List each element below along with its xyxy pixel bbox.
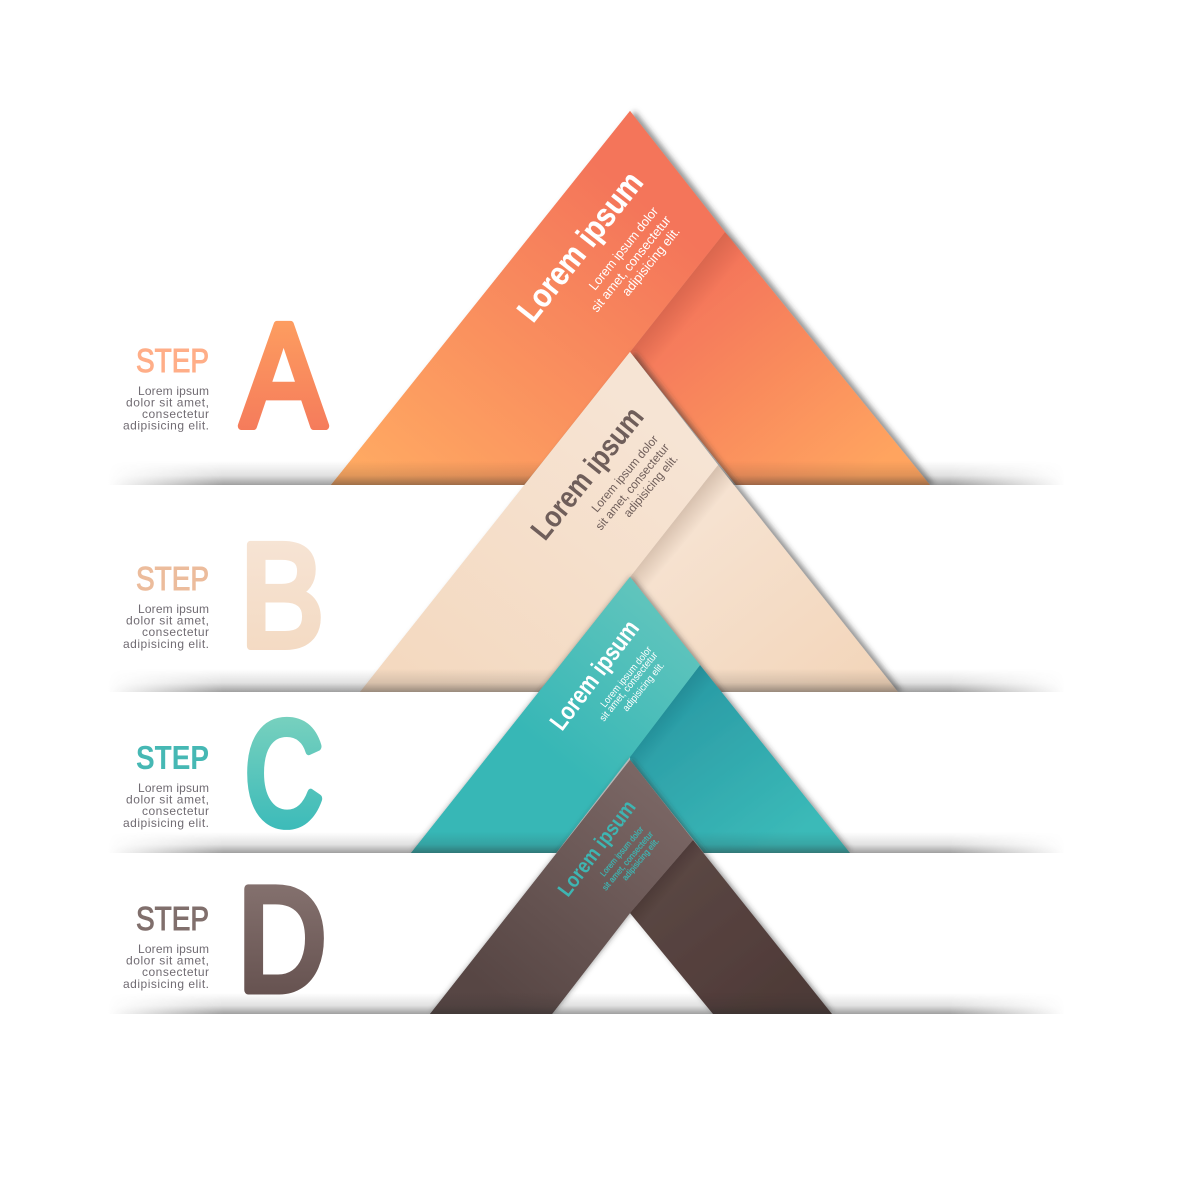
shadow band C [118,836,1054,853]
text: step D description: Lorem ipsum [138,942,209,956]
letter B: B [240,514,324,678]
heading: A ribbon title: Lorem ipsum [509,164,650,328]
text: C ribbon line 2: sit amet, consectetur [598,650,661,724]
text: step C description: adipisicing elit. [123,816,209,830]
heading: C ribbon title: Lorem ipsum [544,615,645,736]
step C label [123,739,209,830]
panel: triangle C [411,577,850,853]
text: A ribbon line 3: adipisicing elit. [619,224,683,299]
heading: STEP D: STEP [136,900,209,937]
heading: STEP A: STEP [136,342,209,379]
heading: B ribbon title: Lorem ipsum [525,401,651,546]
text: D ribbon line 2: sit amet, consectetur [600,829,655,892]
heading: STEP C: STEP [136,739,209,776]
text: step B description [123,602,209,651]
text: step B description: consectetur [142,625,209,639]
heading: STEP B: STEP [136,560,209,597]
letter D: D [238,858,326,1022]
text: A ribbon line 2: sit amet, consectetur [588,212,674,315]
text: D ribbon line 1: Lorem ipsum dolor [598,824,645,878]
text: step D description [123,942,209,991]
shadow band D [118,996,1054,1014]
text: B ribbon line 3: adipisicing elit. [621,452,681,520]
text: D ribbon line 3: adipisicing elit. [620,836,661,882]
text: step D description: consectetur [142,965,209,979]
text: step C description [123,781,209,830]
text: A ribbon line 1: Lorem ipsum dolor [586,203,662,293]
text: C ribbon line 1: Lorem ipsum dolor [599,644,655,710]
step B label [123,560,209,651]
text: step D description: dolor sit amet, [126,954,209,968]
text: step A description: consectetur [142,407,209,421]
text: step D description: adipisicing elit. [123,977,209,991]
panel: chevron D [430,760,832,1014]
letter C: C [245,692,323,856]
step D label [123,900,209,991]
text: step B description: adipisicing elit. [123,637,209,651]
text: B ribbon line 1: Lorem ipsum dolor [589,432,661,515]
shadow band A [118,465,1054,485]
panel: triangle B [360,352,898,692]
text: step C description: consectetur [142,804,209,818]
text: step A description [123,384,209,432]
text: step A description: dolor sit amet, [126,396,209,410]
letter A: A [241,294,326,458]
text: step A description: Lorem ipsum [138,384,209,398]
text: step B description: dolor sit amet, [126,614,209,628]
text: step A description: adipisicing elit. [123,418,209,432]
step A label [123,342,209,432]
text: B ribbon line 2: sit amet, consectetur [593,441,672,533]
text: step C description: Lorem ipsum [138,781,209,795]
text: step B description: Lorem ipsum [138,602,209,616]
text: C ribbon line 3: adipisicing elit. [621,660,667,714]
heading: D ribbon title: Lorem ipsum [554,796,641,901]
shadow band B [118,672,1054,692]
text: step C description: dolor sit amet, [126,792,209,806]
panel: triangle A [331,111,930,485]
